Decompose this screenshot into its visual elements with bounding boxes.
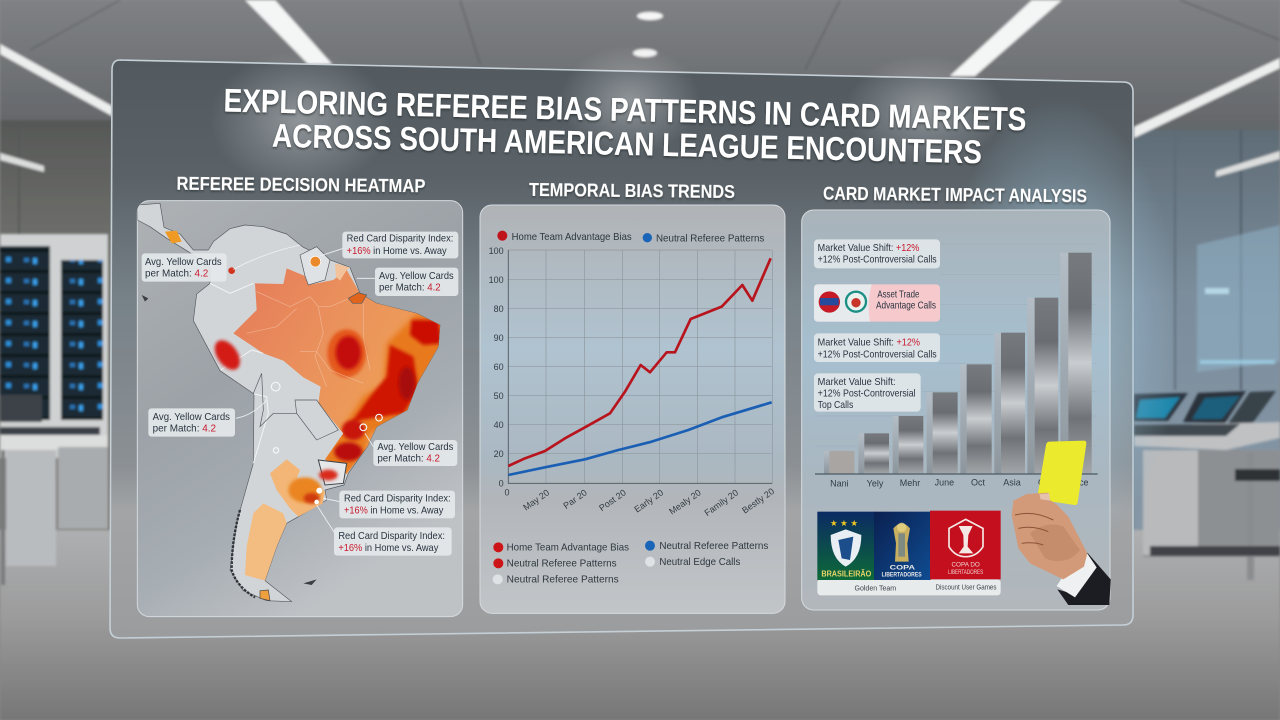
logo: Brasileirão: BRASILEIRÃO [821,569,871,578]
league logos: Golden Team [854,584,896,593]
line chart: Par 20 [561,487,589,511]
panel: referee decision heatmap [137,201,463,617]
callout: market value shift 2: +12% Post-Controversial Calls [818,349,937,360]
callout: red card disparity, north [342,232,458,258]
bar chart: Nani [830,479,849,489]
line chart: Family 20 [703,487,740,518]
callout: market value shift 3: Market Value Shift: [818,377,896,388]
Argentina heat [270,459,325,517]
logo: Brasileirão [821,518,871,578]
bar chart: Mehr [900,478,920,488]
Patagonia shading [245,503,287,581]
line chart: 20 [494,449,504,459]
line chart: Mealy 20 [667,487,703,517]
leader lines [233,245,375,535]
bottom legend: Neutral Edge Calls [659,557,740,568]
logo: red league shield [948,519,983,576]
logo: Copa Libertadores: COPA [890,565,916,571]
background: control consoles and wall display [1134,225,1280,580]
bar chart: Oct [971,478,985,488]
line chart: 80 [494,304,504,314]
title [223,82,1027,170]
callout: market value shift 1: +12% Post-Controversial Calls [818,255,937,266]
line chart: 0 [499,479,504,489]
line chart: 40 [494,420,504,430]
title: EXPLORING REFEREE BIAS PATTERNS IN CARD MARKETS [223,82,1027,137]
callout: market value shift 2 [814,333,940,362]
callout: avg yellow cards, west: Avg. Yellow Cards [153,412,230,423]
map of South America [137,203,443,602]
callout: avg yellow cards, southeast: per Match: 4.2 [377,454,440,465]
logo: Copa Libertadores: LIBERTADORES [882,572,922,579]
line chart: May 20 [521,487,551,513]
line: neutral referee patterns [508,402,772,475]
line chart: 90 [494,333,504,343]
callout: avg yellow cards, southeast [373,440,457,466]
panel: card market impact analysis [802,210,1111,610]
logo: Copa Libertadores [882,523,922,579]
logo: red league shield: LIBERTADORES [948,570,983,576]
top legend: Neutral Referee Patterns [656,234,765,245]
line chart: Early 20 [632,487,665,515]
bottom legend: Neutral Referee Patterns [507,575,619,586]
callout: market value shift 1: Market Value Shift: +12% [818,243,920,254]
line chart: 60 [494,362,504,372]
bar chart: Oct [1038,477,1052,487]
line chart: Bestly 20 [740,486,776,516]
heading: card market impact analysis: CARD MARKET IMPACT ANALYSIS [823,184,1087,206]
callout: market value shift 3 [814,373,921,412]
callout: avg yellow cards, west: per Match: 4.2 [153,424,216,435]
top legend: Home Team Advantage Bias [512,232,632,243]
callout: avg yellow cards, north: per Match: 4.2 [145,269,208,280]
bottom legend: Home Team Advantage Bias [507,543,629,554]
logo: Brasileirão: ★ ★ ★ [830,518,858,528]
callout: avg yellow cards, northeast [375,268,458,296]
callout: market value shift 3: +12% Post-Controversial [818,389,916,400]
bar chart: Pace [1068,477,1089,487]
callout: red card disparity, far south: +16% in Home vs. Away [338,543,438,554]
line chart: Post 20 [597,487,628,513]
title: ACROSS SOUTH AMERICAN LEAGUE ENCOUNTERS [272,117,982,170]
callout: red card disparity, south: +16% in Home vs. Away [344,506,443,517]
callout: red card disparity, north: +16% in Home vs. Away [347,246,447,257]
icon: yellow card [1038,441,1086,505]
main glass panel [110,45,1180,638]
callout: avg yellow cards, southeast: Avg. Yellow Cards [377,442,453,453]
line chart [489,246,776,518]
bottom legend: Neutral Referee Patterns [659,541,769,552]
callout: market value shift 1 [814,239,940,268]
icon: hand holding card [1012,493,1111,605]
hot spots [212,338,242,372]
line chart: 100 [489,246,504,256]
callout: logos and advantage calls: Advantage Calls [876,300,936,311]
line chart: 100 [489,275,504,285]
panel: temporal bias trends [480,205,785,613]
callout: market value shift 2: Market Value Shift: +12% [818,338,920,349]
Brazil [233,268,440,474]
callout: market value shift 3: Top Calls [818,400,853,411]
callout: red card disparity, south [339,491,455,518]
callout: avg yellow cards, north: Avg. Yellow Cards [145,257,222,268]
heading: temporal bias trends: TEMPORAL BIAS TRENDS [529,180,735,202]
callout: red card disparity, far south [334,527,452,556]
callout: avg yellow cards, west [148,408,235,437]
callout: avg yellow cards, north [142,253,227,282]
callout: red card disparity, far south: Red Card Disparity Index: [338,531,445,542]
line chart: 0 [504,487,509,497]
callout: avg yellow cards, northeast: per Match: 4.2 [379,283,441,294]
background: server racks [0,234,108,585]
logo: red league shield: COPA DO [951,563,980,569]
line chart: 50 [494,391,504,401]
heading: referee decision heatmap: REFEREE DECISION HEATMAP [176,174,426,196]
callout: avg yellow cards, northeast: Avg. Yellow Cards [379,271,454,282]
bar chart: June [935,478,954,488]
league logos: Discount User Games [935,582,997,591]
line: home team advantage bias [508,258,771,466]
bar chart: Asia [1003,477,1021,487]
bottom legend [493,541,769,586]
callout: red card disparity, north: Red Card Disparity Index: [347,234,453,245]
callout: logos and advantage calls [814,284,940,322]
bar chart [815,244,1098,489]
bar chart: Yely [867,479,884,489]
state borders [247,292,370,387]
callout: red card disparity, south: Red Card Disparity Index: [344,494,451,505]
Brazil heat spots [323,313,443,477]
top legend [497,231,765,245]
league logos [817,511,1001,595]
callout: logos and advantage calls: Asset Trade [877,289,919,300]
neighbours borders [210,283,347,485]
bottom legend: Neutral Referee Patterns [507,559,617,570]
